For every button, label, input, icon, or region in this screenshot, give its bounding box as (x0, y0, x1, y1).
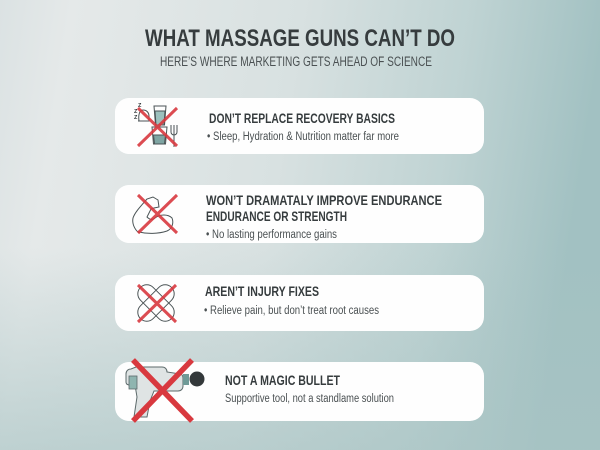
icon: sleep, water and fork crossed out: Z (134, 109, 138, 115)
icon: red cross (133, 360, 192, 421)
bullet text: • No lasting performance gains (206, 229, 337, 241)
panel: recovery basics (115, 98, 484, 154)
heading: AREN’T INJURY FIXES (205, 283, 319, 299)
icon: red cross (138, 195, 177, 233)
panel: endurance (115, 185, 484, 243)
icon: red cross (138, 285, 176, 322)
icon: sleep, water and fork crossed out: Z (134, 115, 138, 121)
body text: Supportive tool, not a standlame solution (225, 393, 394, 405)
icon: massage gun (126, 367, 204, 417)
subtitle: HERE’S WHERE MARKETING GETS AHEAD OF SCIENCE (160, 54, 432, 69)
icon: crossed bandages (134, 281, 178, 325)
bullet text: • Sleep, Hydration & Nutrition matter far more (207, 131, 399, 143)
icon: sleep, water and fork crossed out: Z (138, 103, 142, 109)
icon: flexed arm crossed out (133, 197, 173, 233)
icon: sleep, water and fork crossed out (134, 103, 177, 147)
bullet text: • Relieve pain, but don’t treat root causes (204, 305, 379, 317)
panel: endurance: ENDURANCE OR STRENGTH (206, 208, 347, 224)
heading: DON’T REPLACE RECOVERY BASICS (209, 111, 395, 126)
title: WHAT MASSAGE GUNS CAN’T DO (145, 25, 455, 52)
panel: magic bullet (115, 360, 484, 421)
heading: NOT A MAGIC BULLET (225, 372, 340, 388)
panel: injury (115, 275, 484, 331)
heading: WON’T DRAMATALY IMPROVE ENDURANCE (206, 192, 442, 208)
icon: red cross (138, 108, 177, 146)
